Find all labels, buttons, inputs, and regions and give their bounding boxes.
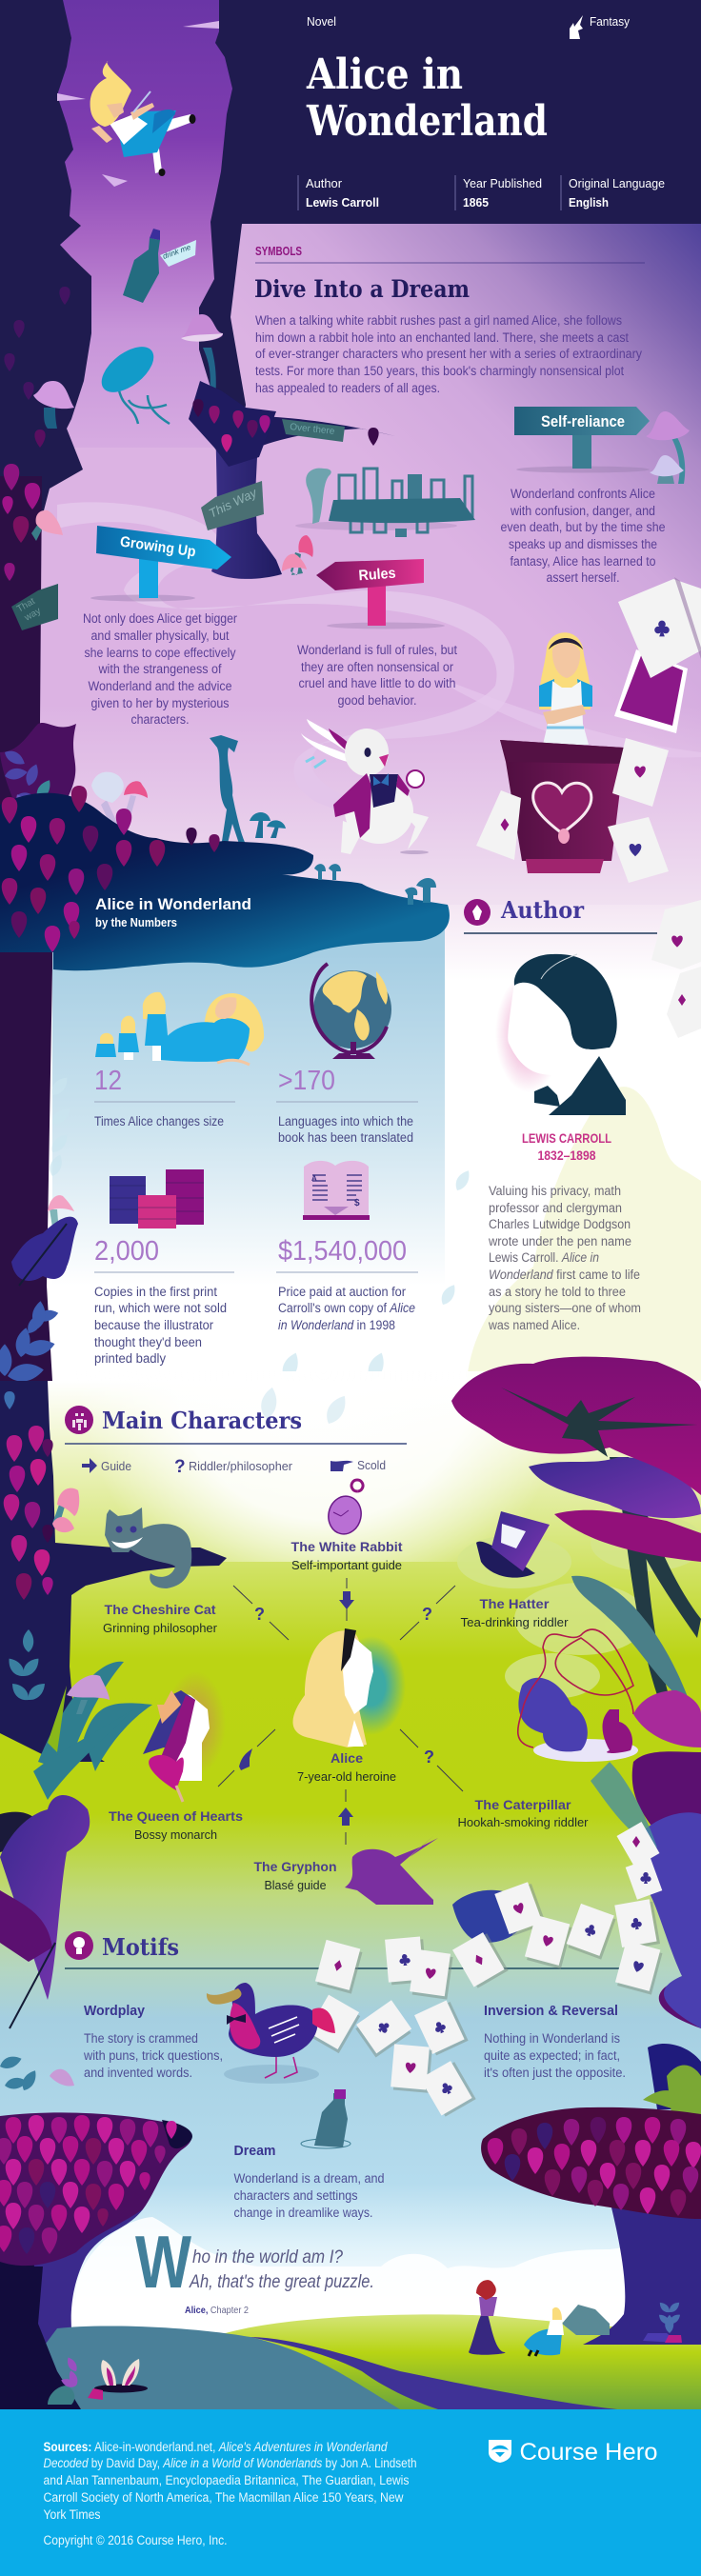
trunk [583,2200,701,2345]
main characters heading [65,1406,407,1444]
text: white rabbit: Self-important guide [291,1558,402,1572]
header [298,15,665,210]
sources: Sources: Alice-in-wonderland.net, Alice's Adventures in Wonderland [44,2440,388,2454]
intro text: of ever-stranger characters who present her with a series of extraordinary [255,347,642,361]
main petal [451,1357,701,1495]
Course Hero logo: Course Hero [520,2439,657,2466]
text: gryphon: The Gryphon [253,1860,337,1874]
text: gryphon: Blasé guide [265,1878,326,1892]
stat: languages: >170 [278,1066,335,1096]
title [306,50,548,146]
stat: first print run: thought they'd been [94,1335,202,1349]
connector: caterpillar to alice [400,1729,463,1791]
canopy [0,2112,191,2266]
stat: auction price: in Wonderland in 1998 [278,1318,395,1332]
that-way sign: way [22,606,43,624]
text: white rabbit [291,1540,403,1572]
hill foliage drops [2,429,220,952]
legend: riddler [174,1457,293,1477]
stems [610,1457,701,1695]
motif: dream [234,2144,385,2220]
lower background: characters and motifs [0,1381,701,2409]
main characters heading: Main Characters [102,1407,302,1434]
panel: lower haze band [448,681,701,758]
connector: rabbit to alice [339,1578,354,1621]
stat: languages: book has been translated [278,1130,413,1145]
over-there sign [282,419,345,442]
author heading [464,896,657,933]
text: queen: Bossy monarch [134,1827,217,1842]
sources: York Times [44,2507,101,2522]
sign: growing up: Growing Up [119,534,197,560]
author bio: as a story he told to three [489,1285,626,1299]
motif: dream: characters and settings [234,2188,358,2203]
stat: first print run [94,1236,234,1366]
meta: language: English [569,195,609,210]
text: growing up: Not only does Alice get bigger [83,611,237,626]
pink mushrooms on trunk [31,510,313,575]
text: caterpillar: Hookah-smoking riddler [457,1815,589,1829]
character: queen of hearts [143,1671,226,1802]
footer panel [0,2409,701,2576]
tree foliage [189,381,379,467]
connector: gryphon to alice [338,1789,353,1845]
text: growing up: and smaller physically, but [91,629,230,643]
icon: unicorn [570,15,583,39]
blue branch [0,1301,60,1384]
motif: wordplay: Wordplay [84,2004,145,2019]
author bio: young sisters—one of whom [489,1301,641,1315]
panel: header background [0,0,701,229]
character: gryphon [345,1836,438,1905]
connector: cheshire to alice [233,1586,289,1640]
author bio: Charles Lutwidge Dodgson [489,1217,631,1231]
quote: Alice, Chapter 2 [185,2306,249,2316]
big magenta flower [451,1357,701,1705]
stat: languages: Languages into which the [278,1114,413,1128]
text: cheshire cat [103,1603,218,1635]
sources: Decoded by David Day, Alice in a World of Wonderlands by Jon A. Lindseth [44,2456,417,2470]
motif: dream: change in dreamlike ways. [234,2206,373,2220]
text: growing up: characters. [131,712,189,727]
scene: rabbit ears and hole [48,2356,148,2405]
rabbit hole shaft [38,0,257,476]
panel: author [445,905,701,1390]
cards near author [651,900,701,1038]
text: self-reliance: assert herself. [547,570,619,585]
winding path [57,502,514,811]
genre label: Novel [307,15,336,29]
text: growing up: she learns to cope effectively [84,646,236,660]
connector: hatter to alice [400,1586,455,1640]
intro text: him down a rabbit hole into an enchanted land. There, she meets a cast [255,330,629,345]
plants lower right [452,1690,701,2114]
intro text: When a talking white rabbit rushes past a girl named Alice, she follows [255,313,622,328]
bottom of numbers section ghost leaves [259,1386,350,1428]
panel: symbols background [229,224,701,924]
mad tea-party table [295,469,475,537]
meta: year [455,175,542,210]
intro text [255,313,642,395]
motif: inversion: Nothing in Wonderland is [484,2031,620,2046]
text: hatter [461,1597,569,1629]
connector: hatter to alice: ? [422,1605,432,1624]
author bio: Lewis Carroll. Alice in [489,1250,599,1265]
copyright: Copyright © 2016 Course Hero, Inc. [44,2533,227,2547]
motifs heading: Motifs [102,1933,179,1961]
plants on numbers trunk [0,1195,78,1384]
meta: year: 1865 [463,195,490,210]
connector: queen to alice [218,1729,275,1787]
shaft shards [57,21,219,187]
stat: auction price: Carroll's own copy of Alice [278,1301,415,1315]
branch [246,415,395,448]
left canopy tree [0,2112,192,2409]
navy cave right wall [199,0,701,448]
drink-me bottle [123,229,196,303]
text: growing up [83,611,237,727]
flying playing cards [306,1881,663,2118]
text: gryphon [253,1860,337,1892]
genre: fantasy: Fantasy [590,15,631,29]
hill mushrooms foreground [314,864,436,905]
text: self-reliance: even death, but by the time she [501,520,665,534]
scene: queen on the hill [469,2280,505,2355]
sources: and Alan Tannenbaum, Encyclopaedia Britannica, The Guardian, Lewis [44,2473,410,2487]
mushrooms by self-reliance sign [646,411,690,484]
motif: inversion: Inversion & Reversal [484,2004,618,2019]
character: hatter hat [476,1511,550,1578]
text: rules: Wonderland is full of rules, but [297,643,457,657]
text: queen [109,1809,243,1842]
legend: scold: Scold [357,1458,386,1472]
text: rules [297,643,457,708]
stat: auction price: Price paid at auction for [278,1285,407,1299]
text: queen: The Queen of Hearts [109,1809,243,1824]
stat: auction price [276,1236,418,1332]
navy cave left wall [0,0,91,552]
intro text: has appealed to readers of all ages. [255,381,440,395]
text: cheshire cat: The Cheshire Cat [105,1603,216,1617]
text: self-reliance: fantasy, Alice has learned to [511,554,655,569]
text: growing up: given to her by mysterious [91,696,230,710]
text: growing up: with the strangeness of [98,662,222,676]
character: caterpillar with hookah [518,1629,638,1762]
mushrooms on hill [91,772,286,838]
numbers heading: by the Numbers [95,916,177,929]
intro text: tests. For more than 150 years, this book's charmingly nonsensical plot [255,364,624,378]
meta: language: Original Language [569,176,665,190]
pink mushroom [48,1195,74,1233]
text: hatter: The Hatter [480,1597,550,1611]
author name [522,1130,611,1163]
icon: stacks of books [110,1169,204,1228]
text: rules: cruel and have little to do with [299,676,455,690]
icon: globe [311,964,391,1059]
motif: wordplay: with puns, trick questions, [83,2048,223,2063]
left tree foliage top [4,287,70,400]
white rabbit [301,719,429,854]
label: SYMBOLS [255,244,302,258]
text: caterpillar: The Caterpillar [474,1798,571,1812]
icon: light bulb [65,1931,93,1960]
author background cloud [467,1087,701,1381]
teal hill [0,2326,400,2409]
right canopy tree [481,2107,701,2345]
that-way sign [11,584,58,630]
meta: author: Author [306,176,343,190]
quote: ho in the world am I? [192,2247,343,2267]
over-there sign: Over there [290,422,335,437]
sign: self-reliance [514,407,650,472]
text: growing up: Wonderland and the advice [88,679,232,693]
sign: growing up [90,526,231,602]
text: alice: Alice [330,1751,363,1766]
author bio: wrote under the pen name [488,1234,631,1248]
character: cheshire cat [105,1508,191,1588]
text: alice [297,1751,396,1784]
motif: wordplay: and invented words. [84,2066,192,2080]
numbers heading: Alice in Wonderland [95,895,251,913]
heading: Dive Into a Dream [254,275,470,303]
text: cheshire cat: Grinning philosopher [103,1621,218,1635]
dodo [207,1983,335,2084]
legend [82,1457,386,1477]
title: Alice in [306,50,463,99]
symbols heading block [254,244,642,395]
left foliage [0,723,76,840]
text: self-reliance [501,487,665,585]
stat: first print run: printed badly [94,1351,166,1366]
icon: pen nib [464,899,491,926]
trunk and boot [211,419,282,579]
author bio: Valuing his privacy, math [489,1184,621,1198]
dark blue ground wave [0,793,450,970]
floating stool [93,338,170,424]
pale clouds on right [457,1514,701,1699]
legend: riddler: Riddler/philosopher [189,1459,293,1473]
motif: wordplay [83,2004,223,2080]
icon: open book [303,1161,370,1220]
character: alice silhouette [293,1628,406,1747]
meta: language [561,175,665,210]
author name: 1832–1898 [537,1148,596,1163]
heart emblem [533,783,591,844]
text: caterpillar [457,1798,589,1829]
podium [500,740,624,873]
text: alice: 7-year-old heroine [297,1769,396,1784]
icon: open book: $ [354,1198,360,1208]
Lewis Carroll silhouette [495,954,626,1115]
author bio: Wonderland first came to life [489,1268,640,1282]
author heading: Author [500,896,584,924]
text: self-reliance: speaks up and dismisses the [509,537,657,551]
motif: dream: Dream [234,2144,276,2159]
scene: rock and plant [643,2300,682,2343]
drop cap: W [135,2220,191,2304]
motif: inversion: it's often just the opposite. [484,2066,626,2080]
scene: alice sitting [524,2305,610,2356]
icon: open book: A [311,1174,317,1183]
left trunk foot [0,2266,81,2409]
canopy [481,2107,701,2219]
author name: LEWIS CARROLL [522,1130,611,1146]
sources [44,2440,417,2522]
quote: Ah, that's the great puzzle. [189,2272,374,2292]
author bio: was named Alice. [488,1318,580,1332]
that-way sign: That [15,596,37,615]
Alice at the podium [539,632,592,745]
text: rules: good behavior. [337,693,417,708]
text: white rabbit: The White Rabbit [291,1540,403,1554]
stat: 12: 12 [94,1066,122,1096]
icon: four growing Alices [95,992,264,1065]
trunk [0,2209,143,2409]
canopy scales [488,2117,701,2216]
left flowers at motifs [0,2053,74,2093]
canopy scales [0,2115,177,2333]
stat: first print run: run, which were not sold [94,1301,227,1315]
falling Alice [90,61,196,176]
floating bottle [301,2089,350,2148]
legend: riddler: ? [174,1457,186,1477]
legend: guide: Guide [101,1459,131,1473]
this-way sign: This Way [207,485,260,521]
icon: people [65,1406,93,1434]
motif: inversion [484,2004,626,2080]
tree canopy drops [4,1391,53,1600]
motif: inversion: quite as expected; in fact, [484,2048,620,2063]
stat: first print run: Copies in the first print [94,1285,217,1299]
motif: wordplay: The story is crammed [84,2031,198,2046]
mushrooms in shaft [33,314,223,429]
playing cards by podium [476,577,701,883]
author bio: professor and clergyman [489,1201,622,1215]
plants lower left [0,1629,152,2028]
stat: first print run: 2,000 [94,1236,159,1267]
pale ghost leaves [47,1074,473,1383]
walking bird silhouette [210,735,246,848]
green hill [219,2314,701,2409]
mushrooms left of cat [52,1488,79,1532]
drink-me bottle: drink me [162,243,192,261]
white glow behind heading [57,1371,591,1562]
character: white rabbit watch [325,1480,365,1537]
meta: author [298,175,379,210]
text: self-reliance: with confusion, danger, and [510,504,655,518]
left tree trunk continued [0,1381,227,1762]
connector: caterpillar to alice: ? [424,1747,434,1767]
lower dark petals [529,1457,701,1518]
text: hatter: Tea-drinking riddler [461,1615,569,1629]
clouds [76,2217,701,2314]
panel: by the numbers [52,914,445,1390]
stat: languages [276,1066,418,1145]
quote [135,2220,374,2316]
tree with signs [189,381,395,579]
panel: fade to pale pink [0,705,701,924]
purple river [250,2337,617,2409]
text: rules: they are often nonsensical or [301,660,453,674]
panel: lower lilac field [0,448,701,924]
this-way sign [201,481,264,530]
stat: auction price: $1,540,000 [278,1236,407,1267]
title: Wonderland [306,97,548,146]
meta: author: Lewis Carroll [306,195,379,210]
sign: self-reliance: Self-reliance [541,413,625,430]
connector: cheshire to alice: ? [254,1605,265,1624]
navy leaf [11,1217,78,1281]
motifs heading [65,1931,179,1961]
stat: 12: Times Alice changes size [94,1114,224,1128]
motif: dream: Wonderland is a dream, and [234,2171,385,2186]
sources: Carroll Society of North America, The Macmillan Alice 150 Years, New [44,2490,404,2505]
sign: rules [316,559,445,629]
sign: rules: Rules [358,566,396,584]
stat: 12 [94,1066,235,1128]
legend: scold [330,1458,386,1472]
author bio [488,1184,641,1332]
left tree trunk [0,476,53,1381]
meta: year: Year Published [463,176,542,190]
numbers heading [95,895,251,929]
stat: first print run: because the illustrator [94,1318,214,1332]
landscape hills [0,2314,701,2409]
legend: guide [82,1458,131,1473]
text: self-reliance: Wonderland confronts Alice [511,487,655,501]
